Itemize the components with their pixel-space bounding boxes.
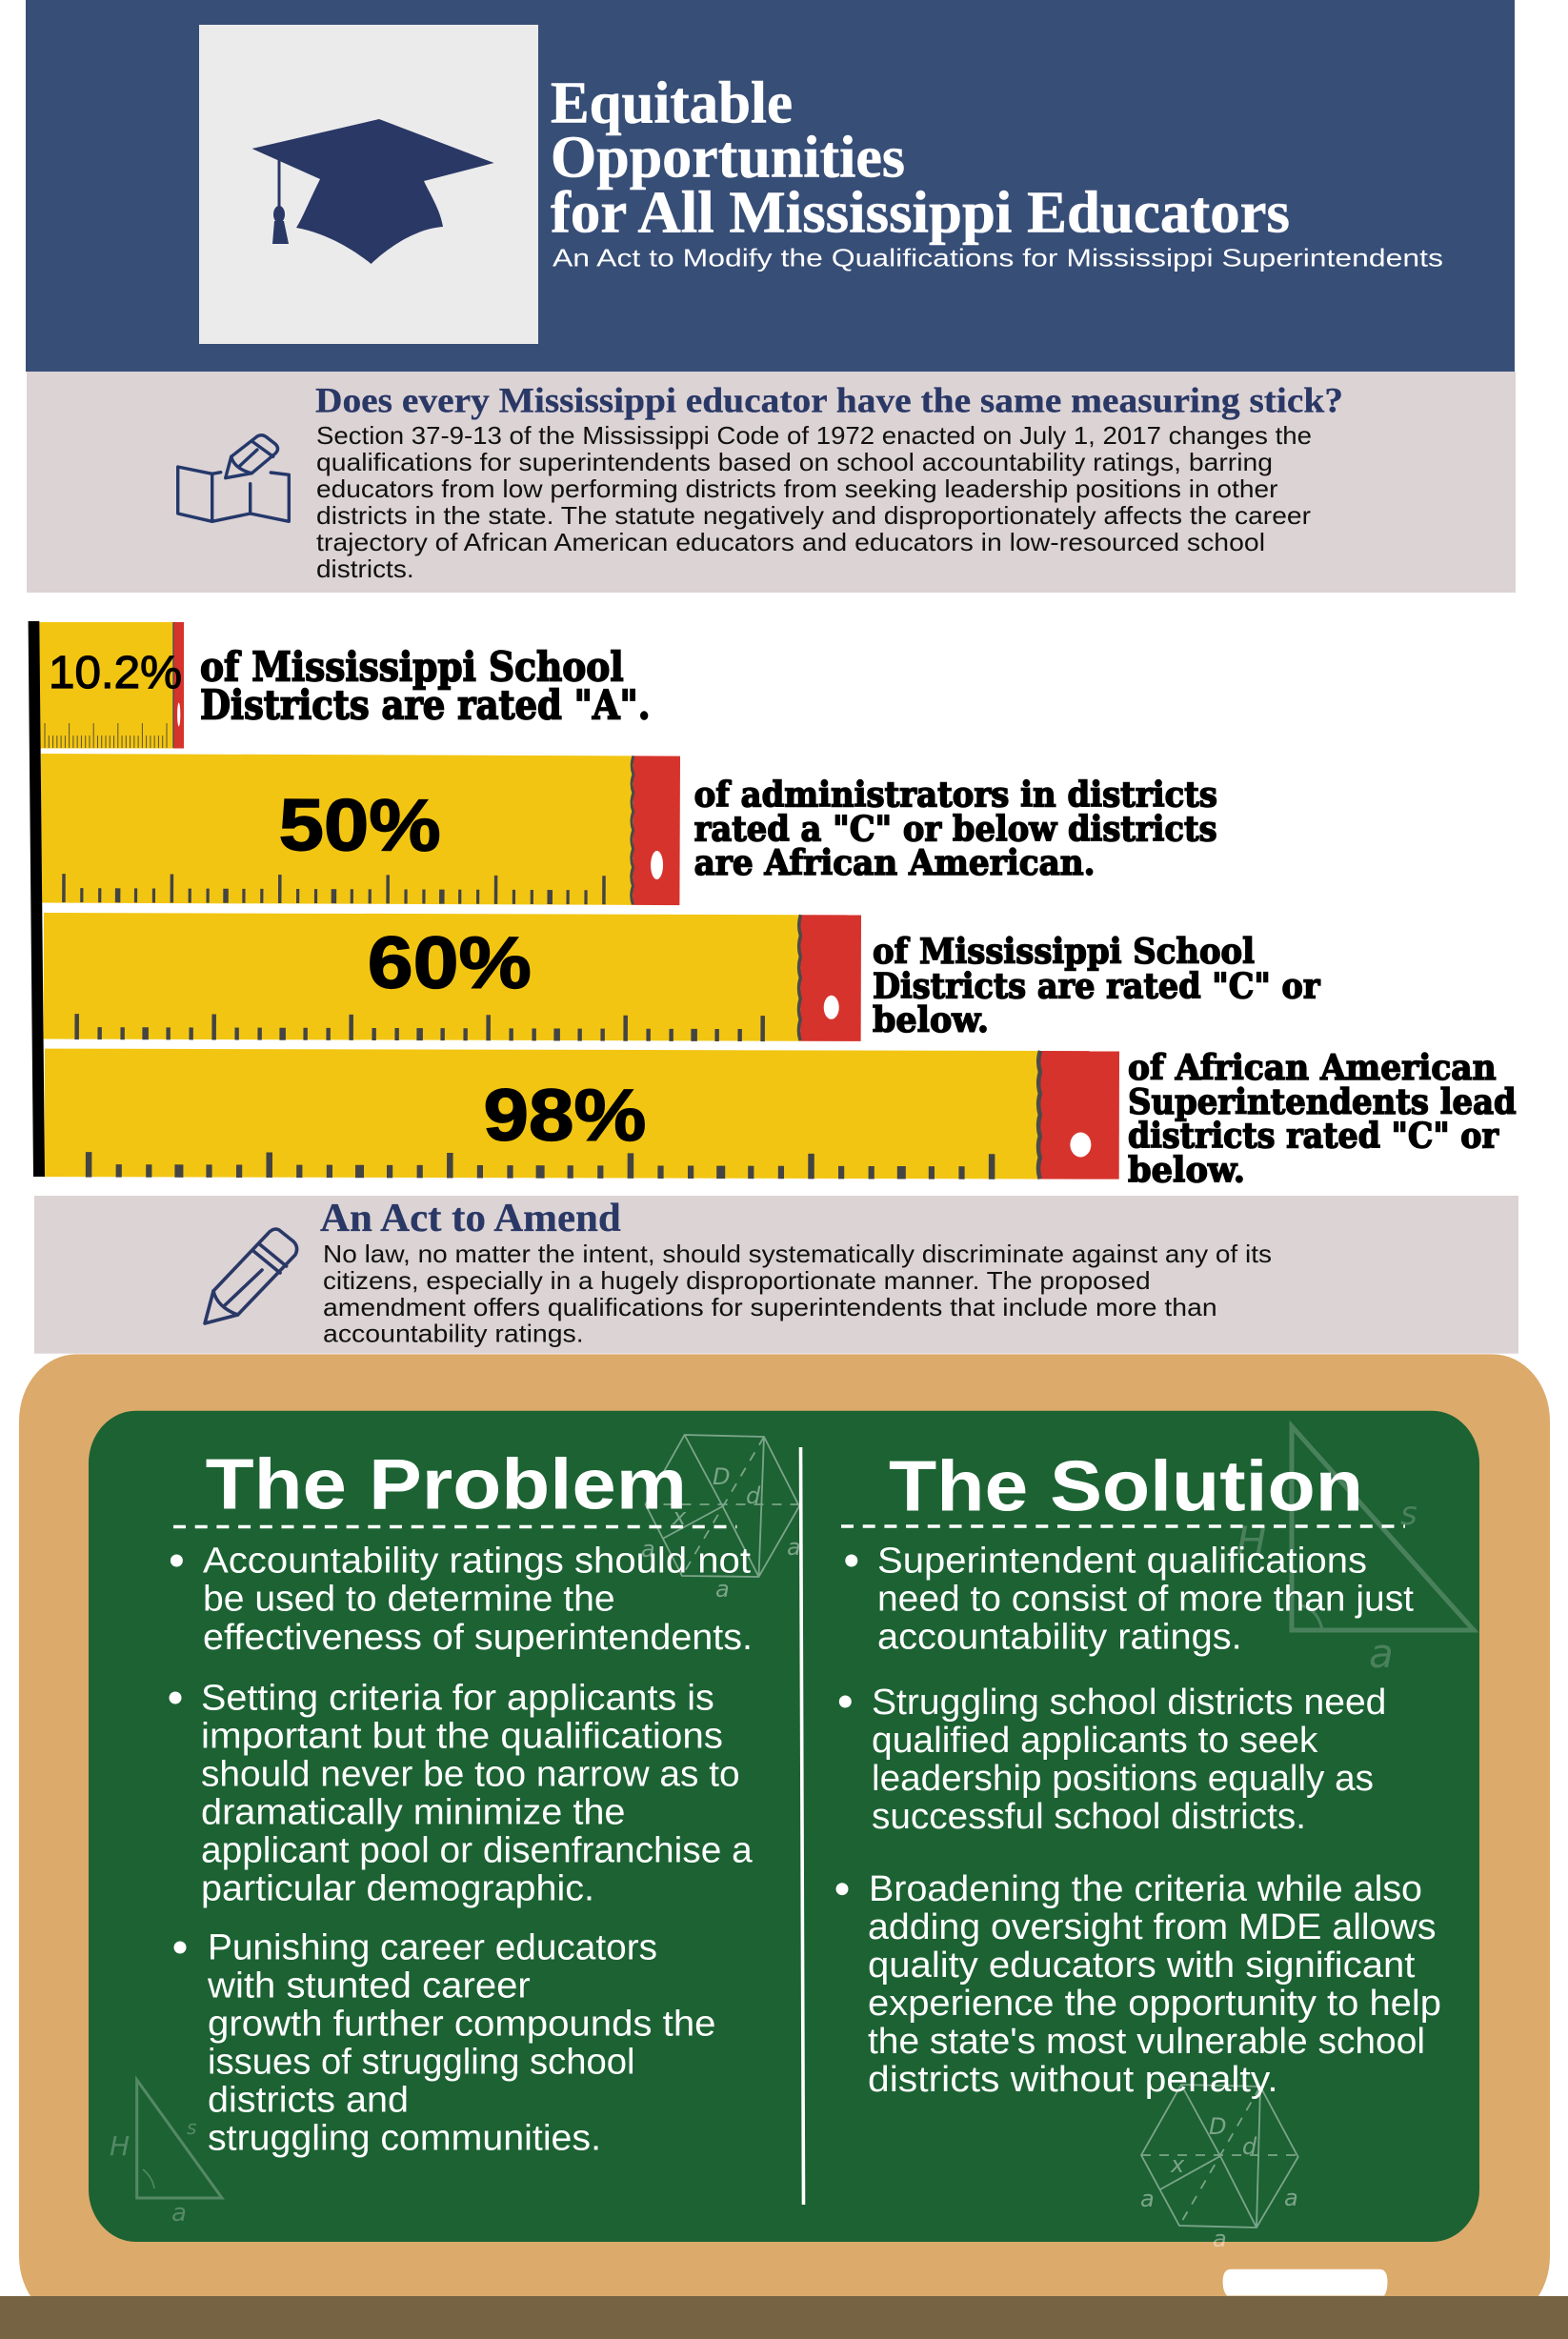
- bullet: broadening the criteria: Broadening the criteria while also: [869, 1869, 1422, 1909]
- text block: districts.: [316, 555, 414, 583]
- bullet: broadening the criteria: the state's most vulnerable school: [868, 2022, 1425, 2062]
- chalk drawing: hexagon top: a: [641, 1536, 655, 1563]
- label: African American superintendents: below.: [1128, 1151, 1245, 1191]
- chalk drawing: hexagon top: d: [746, 1482, 761, 1509]
- chalk drawing: hexagon bottom: a: [1284, 2185, 1298, 2211]
- chalk drawing: hexagon bottom: D: [1209, 2113, 1226, 2140]
- title: [551, 71, 1290, 246]
- chalk drawing: triangle bottom left: H: [110, 2130, 130, 2162]
- text block: citizens, especially in a hugely disproportionate manner. The proposed: [323, 1266, 1151, 1295]
- title: for All Mississippi Educators: [551, 181, 1290, 246]
- label: C or below districts: [873, 932, 1320, 1040]
- label: A districts: Districts are rated "A".: [200, 682, 651, 729]
- title: Equitable: [551, 71, 793, 136]
- bullet: punishing career educators: [173, 1928, 716, 2159]
- bullet: broadening the criteria: districts without penalty.: [868, 2060, 1278, 2100]
- bullet: broadening the criteria: quality educators with significant: [868, 1946, 1416, 1986]
- bullet: setting criteria: should never be too narrow as to: [201, 1754, 740, 1794]
- chalk drawing: triangle top right: a: [1369, 1630, 1394, 1677]
- ruler: 98 percent: [45, 1049, 1119, 1180]
- column divider: [800, 1447, 804, 2205]
- bullet: superintendent qualifications: accountability ratings.: [877, 1618, 1242, 1658]
- chalk drawing: hexagon bottom: [1140, 2085, 1298, 2252]
- bullet: struggling school districts: [839, 1683, 1386, 1837]
- bullet: struggling school districts: qualified applicants to seek: [872, 1721, 1318, 1761]
- ruler: 10.2 percent: [39, 622, 184, 749]
- bullet: accountability ratings: Accountability ratings should not: [203, 1542, 751, 1582]
- chalk drawing: hexagon bottom: d: [1242, 2133, 1257, 2160]
- label: C or below districts: Districts are rated "C" or: [873, 966, 1320, 1006]
- bullet: broadening the criteria: [836, 1869, 1441, 2100]
- text block: districts in the state. The statute negatively and disproportionately affects the career: [316, 501, 1311, 530]
- chalk drawing: triangle bottom left: a: [171, 2199, 187, 2228]
- panel: measuring stick intro: [27, 372, 1516, 593]
- label: administrators: of administrators in districts: [694, 775, 1217, 815]
- title: Opportunities: [551, 126, 905, 191]
- bullet: accountability ratings: [171, 1542, 753, 1658]
- stat: 60%: 60%: [368, 921, 532, 1004]
- chalk drawing: hexagon bottom: x: [1170, 2151, 1185, 2178]
- bullet: punishing career educators: with stunted career: [207, 1966, 531, 2006]
- stat: 10.2%: 10.2%: [49, 648, 182, 698]
- text block: No law, no matter the intent, should systematically discriminate against any of its: [323, 1240, 1272, 1268]
- bullet: accountability ratings: be used to determine the: [203, 1580, 615, 1620]
- eraser: [1223, 2269, 1387, 2296]
- heading: the problem: The Problem: [206, 1444, 687, 1524]
- stat: 98%: 98%: [483, 1075, 647, 1157]
- bullet: setting criteria: important but the qualifications: [201, 1716, 723, 1756]
- chalk drawing: hexagon bottom: a: [1213, 2226, 1227, 2252]
- ruler: 60 percent: [44, 913, 861, 1041]
- chalk drawing: hexagon top: D: [713, 1463, 730, 1490]
- bullet: setting criteria: [170, 1678, 754, 1908]
- label: African American superintendents: [1128, 1048, 1517, 1191]
- icon: map and pencil: [178, 435, 289, 521]
- chalk drawing: triangle top right: [1236, 1426, 1474, 1677]
- bullet: superintendent qualifications: need to consist of more than just: [877, 1580, 1414, 1620]
- bullet: setting criteria: dramatically minimize the: [201, 1792, 625, 1832]
- label: C or below districts: of Mississippi School: [873, 932, 1255, 972]
- heading: the solution: The Solution: [889, 1446, 1363, 1526]
- column: the solution: [836, 1446, 1441, 2100]
- chalk drawing: hexagon top: [641, 1435, 801, 1603]
- text block: [323, 1240, 1272, 1347]
- chalk tray: [0, 2296, 1568, 2339]
- column: the problem: [170, 1444, 754, 2159]
- bullet: punishing career educators: struggling communities.: [208, 2119, 601, 2159]
- label: administrators: [694, 775, 1217, 883]
- panel: an act to amend: [34, 1196, 1518, 1354]
- chalk drawing: triangle top right: s: [1400, 1495, 1417, 1533]
- heading: An Act to Amend: [320, 1197, 621, 1240]
- chalk drawing: hexagon top: a: [715, 1576, 730, 1603]
- bullet: setting criteria: Setting criteria for applicants is: [201, 1678, 714, 1718]
- ruler: 50 percent: [40, 754, 680, 905]
- subtitle: An Act to Modify the Qualifications for Mississippi Superintendents: [553, 244, 1443, 272]
- chalk drawing: hexagon top: x: [672, 1503, 687, 1530]
- zero line of rulers: [29, 621, 45, 1177]
- text block: accountability ratings.: [323, 1319, 584, 1347]
- header banner: [26, 0, 1515, 372]
- text block: Section 37-9-13 of the Mississippi Code of 1972 enacted on July 1, 2017 changes the: [316, 421, 1312, 450]
- label: C or below districts: below.: [873, 1000, 989, 1040]
- chalk drawing: triangle bottom left: [110, 2080, 222, 2228]
- bullet: broadening the criteria: experience the opportunity to help: [868, 1984, 1441, 2024]
- icon panel: graduation cap: [199, 25, 538, 344]
- label: African American superintendents: of African American: [1128, 1048, 1497, 1088]
- bullet: punishing career educators: growth further compounds the: [208, 2005, 716, 2045]
- bullet: struggling school districts: leadership positions equally as: [872, 1759, 1374, 1799]
- stat: 50%: 50%: [279, 784, 441, 867]
- bullet: superintendent qualifications: [845, 1542, 1414, 1658]
- icon: pencil: [205, 1229, 297, 1323]
- bullet: struggling school districts: successful school districts.: [872, 1797, 1306, 1837]
- bullet: setting criteria: applicant pool or disenfranchise a: [201, 1830, 754, 1870]
- text block: trajectory of African American educators and educators in low-resourced school: [316, 528, 1265, 556]
- chalkboard surface: [89, 1411, 1479, 2242]
- bullet: punishing career educators: Punishing career educators: [208, 1928, 657, 1968]
- chalk drawing: triangle top right: H: [1236, 1518, 1267, 1564]
- bullet: struggling school districts: Struggling school districts need: [872, 1683, 1386, 1723]
- bullet: setting criteria: particular demographic.: [201, 1868, 594, 1908]
- bullet: superintendent qualifications: Superintendent qualifications: [877, 1542, 1367, 1582]
- chalkboard frame: [19, 1354, 1550, 2323]
- label: African American superintendents: Superintendents lead: [1128, 1082, 1517, 1122]
- label: A districts: of Mississippi School: [200, 643, 624, 690]
- bullet: broadening the criteria: adding oversight from MDE allows: [868, 1907, 1437, 1947]
- label: A districts: [200, 643, 651, 729]
- text block: amendment offers qualifications for superintendents that include more than: [323, 1293, 1217, 1321]
- label: administrators: are African American.: [694, 843, 1096, 883]
- text block: educators from low performing districts from seeking leadership positions in other: [316, 474, 1278, 503]
- text block: [316, 421, 1312, 583]
- heading: Does every Mississippi educator have the same measuring stick?: [315, 382, 1343, 421]
- label: African American superintendents: districts rated "C" or: [1128, 1117, 1499, 1157]
- chalk drawing: hexagon top: a: [787, 1534, 801, 1561]
- bullet: punishing career educators: districts and: [208, 2081, 409, 2121]
- bullet: punishing career educators: issues of struggling school: [208, 2043, 634, 2083]
- label: administrators: rated a "C" or below districts: [694, 809, 1217, 849]
- chalk drawing: hexagon bottom: a: [1140, 2186, 1155, 2212]
- text block: qualifications for superintendents based on school accountability ratings, barring: [316, 448, 1273, 476]
- chalk drawing: triangle bottom left: s: [187, 2116, 196, 2139]
- bullet: accountability ratings: effectiveness of superintendents.: [203, 1618, 753, 1658]
